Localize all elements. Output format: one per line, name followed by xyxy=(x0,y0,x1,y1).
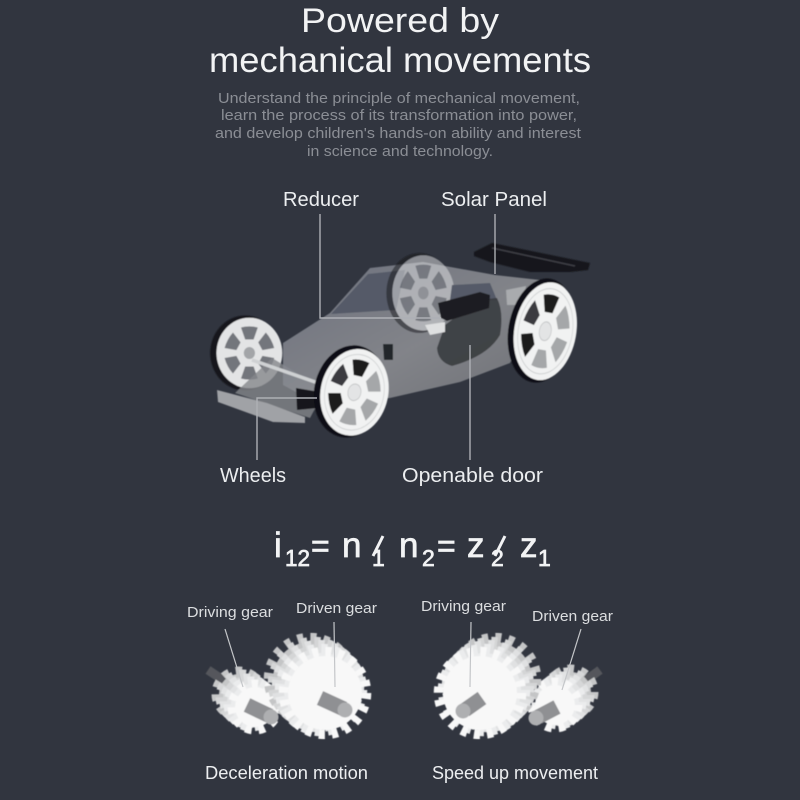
description text: Understand the principle of mechanical movement, xyxy=(218,90,580,107)
driven gear, large xyxy=(268,638,366,734)
engine detail xyxy=(425,322,445,335)
formula: n xyxy=(399,526,418,565)
captions: Deceleration motion xyxy=(205,763,368,783)
rear near wheel xyxy=(500,273,585,388)
solar panel detail xyxy=(506,286,526,305)
driving gear, small xyxy=(208,670,278,730)
formula: 2 xyxy=(491,545,504,571)
front dark intake xyxy=(296,388,320,410)
formula: = xyxy=(437,528,456,564)
gear set: speed up xyxy=(438,638,600,734)
gear labels xyxy=(187,598,613,625)
far front wheel xyxy=(210,316,282,390)
title: mechanical movements xyxy=(209,41,591,80)
leader lines xyxy=(257,214,495,460)
description text: and develop children's hands-on ability and interest xyxy=(215,125,582,142)
car labels: Solar Panel xyxy=(441,189,547,211)
description text: learn the process of its transformation into power, xyxy=(221,107,577,124)
title: Powered by xyxy=(301,2,499,40)
formula: n xyxy=(342,526,361,565)
gear set: deceleration xyxy=(208,638,366,734)
car labels xyxy=(220,189,547,487)
driving gear, large xyxy=(438,638,536,734)
driven gear, small xyxy=(532,668,600,728)
formula xyxy=(274,526,551,571)
car illustration xyxy=(210,243,590,445)
door side window xyxy=(450,283,497,300)
car labels: Wheels xyxy=(220,465,286,487)
formula: z xyxy=(520,526,538,565)
car labels: Openable door xyxy=(402,465,543,487)
gear labels: Driving gear xyxy=(421,598,506,615)
captions xyxy=(205,763,598,783)
gearbox reducer xyxy=(438,292,490,321)
gear labels: Driving gear xyxy=(187,604,273,621)
gear labels: Driven gear xyxy=(532,608,613,625)
front axle xyxy=(252,360,318,383)
shafts xyxy=(247,698,352,724)
formula: 1 xyxy=(372,545,385,571)
formula: 2 xyxy=(422,545,435,571)
description text xyxy=(215,90,582,160)
gear leader lines xyxy=(225,622,581,690)
formula: i xyxy=(274,526,282,565)
rear spoiler xyxy=(474,243,590,272)
title xyxy=(209,2,591,80)
formula: = xyxy=(311,528,330,564)
formula: 1 xyxy=(538,545,551,571)
far rear wheel xyxy=(386,253,454,333)
captions: Speed up movement xyxy=(432,763,598,783)
openable door panel xyxy=(437,298,501,366)
shafts xyxy=(456,698,557,726)
description text: in science and technology. xyxy=(307,143,493,160)
side vent xyxy=(383,344,393,360)
car labels: Reducer xyxy=(283,189,359,211)
formula: z xyxy=(467,526,484,565)
formula: 12 xyxy=(285,545,310,571)
front splitter xyxy=(217,390,305,423)
gear labels: Driven gear xyxy=(296,600,377,617)
car body xyxy=(283,262,540,405)
front bodywork xyxy=(235,358,325,418)
windscreen xyxy=(331,270,405,314)
front near wheel xyxy=(305,338,397,445)
